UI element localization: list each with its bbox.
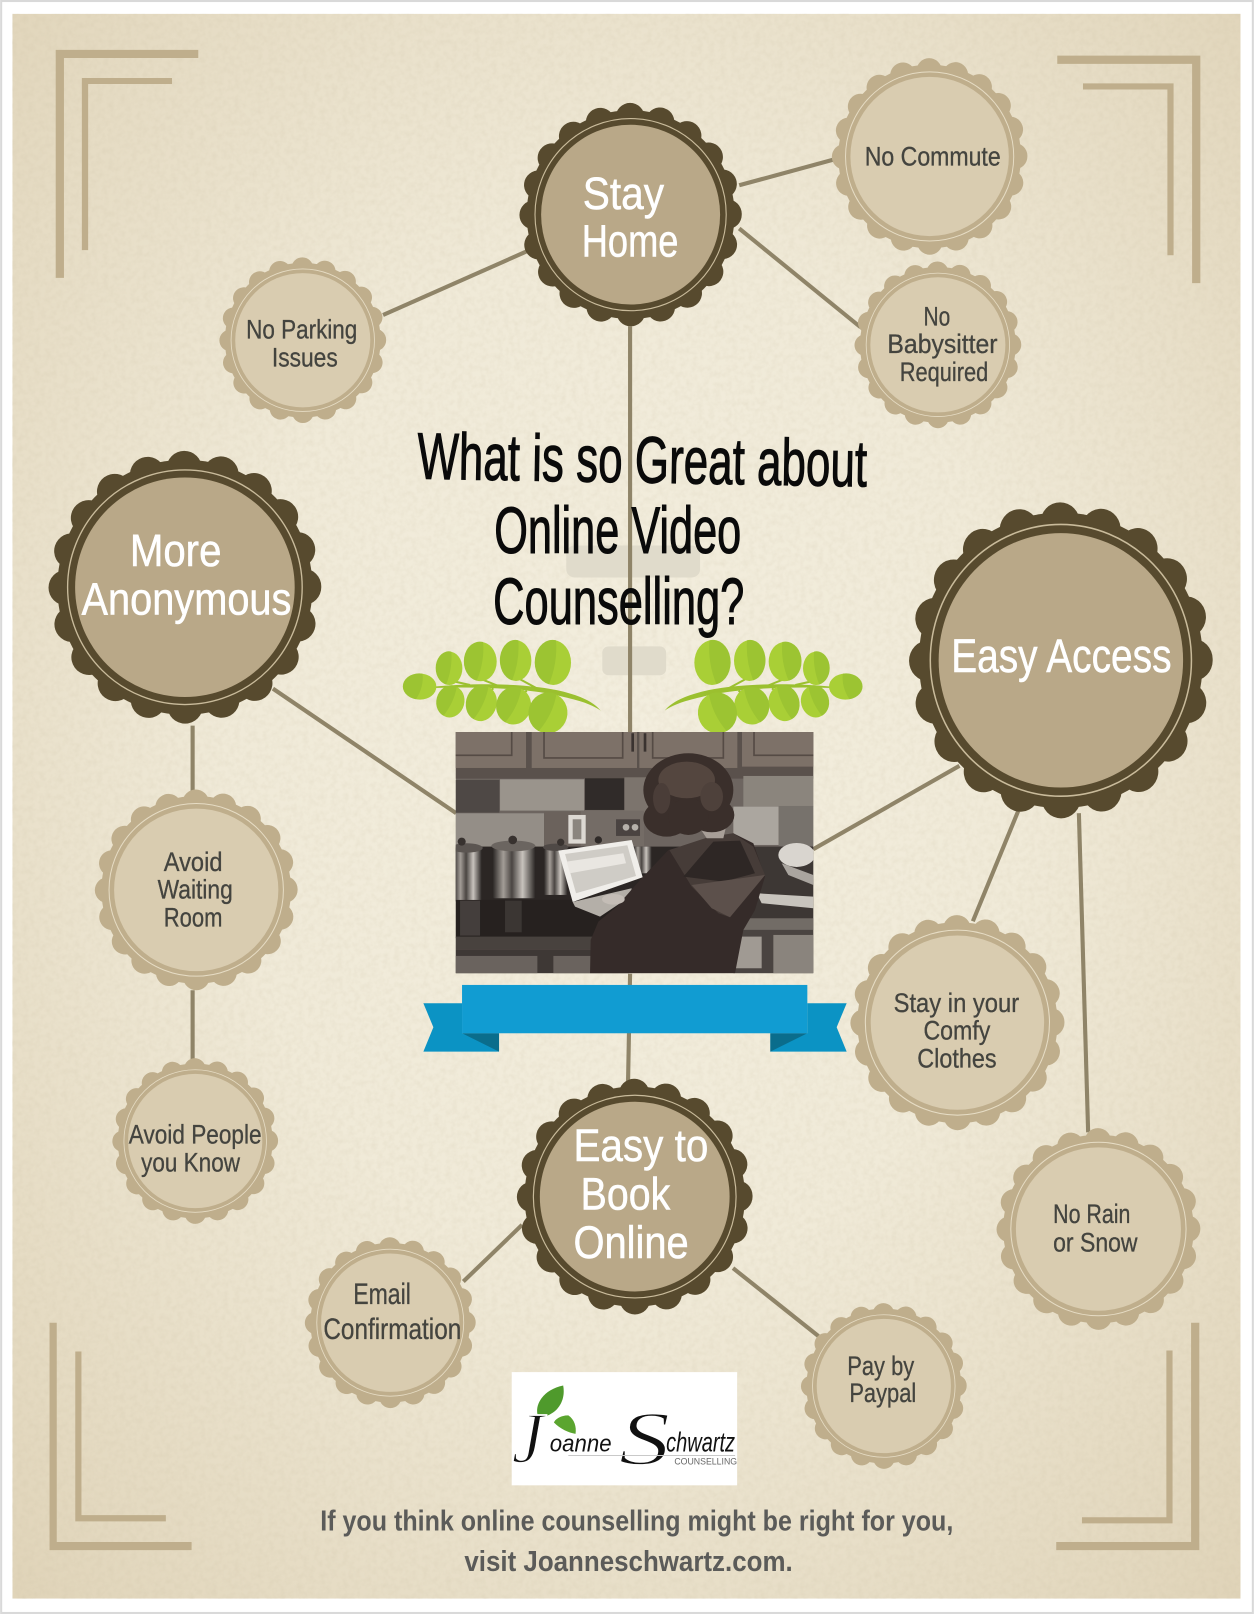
- badge: Stay Home: Stay: [583, 168, 664, 219]
- badge: Avoid Waiting Room: Waiting: [158, 875, 233, 905]
- badge: Stay Home: [527, 110, 735, 319]
- badge: Avoid Waiting Room: Room: [164, 902, 222, 932]
- badge: More Anonymous: More: [130, 525, 221, 576]
- badge: Email Confirmation: Confirmation: [323, 1313, 461, 1346]
- woman: [590, 753, 765, 973]
- title: [417, 419, 868, 638]
- badge: Avoid Waiting Room: Avoid: [164, 847, 222, 877]
- upper cabinets: [453, 730, 816, 779]
- logo: Joanne Schwartz Counselling: S: [619, 1398, 670, 1482]
- logo: Joanne Schwartz Counselling: COUNSELLING: [674, 1457, 737, 1467]
- icon: logo leaves: [537, 1385, 576, 1434]
- badge: No Parking Issues: No Parking: [246, 315, 357, 345]
- badge: Stay Home: Home: [582, 215, 678, 266]
- badge: Email Confirmation: [310, 1243, 470, 1403]
- badge: No Commute: [838, 65, 1021, 248]
- badge: Easy Access: [919, 513, 1203, 808]
- logo: Joanne Schwartz Counselling: oanne: [550, 1431, 612, 1457]
- laptop: [558, 840, 643, 917]
- logo: Joanne Schwartz Counselling: [512, 1372, 737, 1485]
- badge: Avoid Waiting Room: [101, 796, 291, 984]
- badge: Pay by Paypal: Pay by: [847, 1351, 915, 1381]
- badge: More Anonymous: Anonymous: [81, 574, 291, 625]
- badge: No Babysitter Required: No: [923, 301, 950, 331]
- badge: Stay in your Comfy Clothes: [857, 922, 1058, 1123]
- badge: No Parking Issues: [225, 263, 381, 418]
- photo: woman at laptop in kitchen: [451, 730, 816, 973]
- badge: Stay in your Comfy Clothes: Stay in your: [894, 988, 1019, 1018]
- icon: right leaf sprig: [665, 640, 863, 738]
- badge: Email Confirmation: Email: [353, 1278, 411, 1311]
- hair: [643, 753, 734, 837]
- badge: Stay in your Comfy Clothes: Comfy: [923, 1016, 991, 1046]
- badge: No Babysitter Required: Babysitter: [887, 329, 998, 359]
- ribbon banner: [423, 985, 847, 1052]
- footer call to action: [320, 1506, 953, 1578]
- badge: Avoid People you Know: Avoid People: [129, 1120, 262, 1150]
- faint title backing shapes: [566, 546, 700, 675]
- central artwork: sprigs, photo, ribbon: [403, 640, 863, 1052]
- badge: No Commute: No Commute: [865, 142, 1001, 172]
- badge: No Rain or Snow: [1003, 1135, 1194, 1323]
- badge: Easy to Book Online: Easy to: [573, 1120, 708, 1171]
- badge: Pay by Paypal: Paypal: [849, 1378, 916, 1408]
- footer call to action: If you think online counselling might be right for you,: [320, 1506, 953, 1538]
- logo: Joanne Schwartz Counselling: chwartz: [666, 1426, 735, 1457]
- canisters and counter: [451, 836, 689, 973]
- badge: Avoid People you Know: you Know: [141, 1147, 241, 1177]
- badge: No Parking Issues: Issues: [272, 342, 338, 372]
- badge: Avoid People you Know: [118, 1064, 273, 1218]
- badge: More Anonymous: [57, 460, 312, 715]
- badge: No Rain or Snow: No Rain: [1053, 1199, 1130, 1229]
- footer call to action: visit Joanneschwartz.com.: [464, 1546, 793, 1578]
- badge: No Babysitter Required: [860, 267, 1016, 423]
- connector lines: [193, 160, 1088, 1336]
- badge: Pay by Paypal: [806, 1309, 961, 1463]
- badge: No Rain or Snow: or Snow: [1053, 1228, 1138, 1258]
- title: Online Video: [494, 493, 741, 567]
- title: What is so Great about: [417, 419, 868, 500]
- badge: No Babysitter Required: Required: [900, 357, 988, 387]
- badge: Easy to Book Online: [525, 1086, 745, 1307]
- badge: Easy to Book Online: Online: [573, 1217, 689, 1268]
- icon: left leaf sprig: [403, 640, 601, 738]
- badge: Stay in your Comfy Clothes: Clothes: [917, 1043, 997, 1073]
- logo: Joanne Schwartz Counselling: J: [512, 1399, 547, 1479]
- backsplash tiles: [456, 776, 813, 847]
- title: Counselling?: [493, 564, 744, 638]
- badge: Easy to Book Online: Book: [581, 1168, 671, 1219]
- badge: Easy Access: Easy Access: [951, 630, 1172, 683]
- right counter: [733, 843, 814, 974]
